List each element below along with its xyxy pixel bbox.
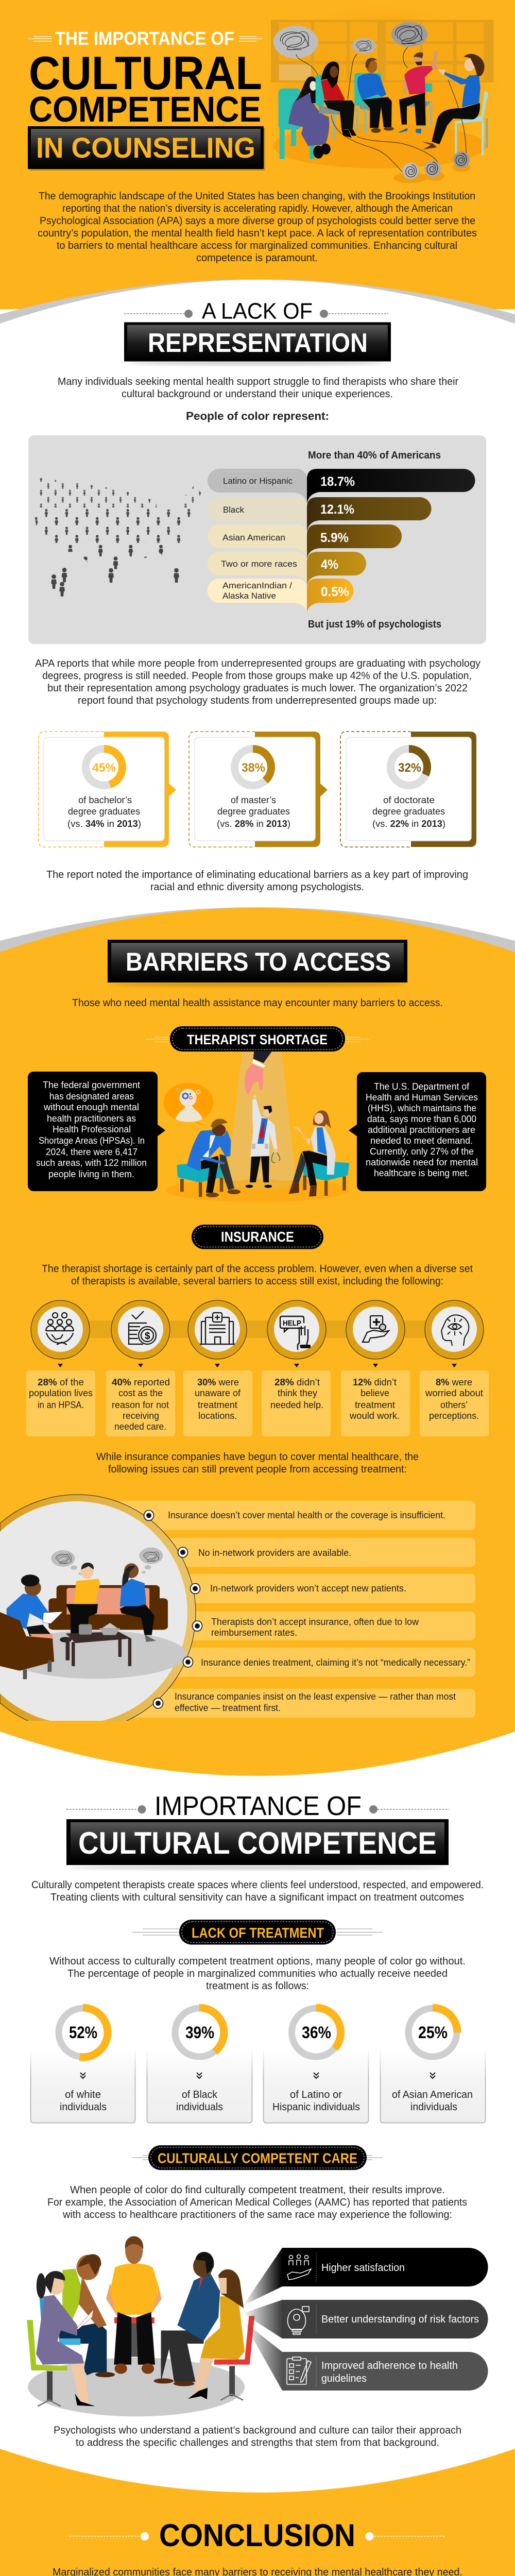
row: Black 12.1% bbox=[208, 497, 432, 531]
stat card: 8% perceptions bbox=[420, 1370, 489, 1436]
stat card: 12% wouldn't work bbox=[341, 1370, 410, 1436]
doctor seated on stool bbox=[289, 1110, 349, 1197]
man in green covering face bbox=[40, 2254, 115, 2377]
text: of doctorate: (vs. 22% in 2013) bbox=[372, 819, 445, 829]
right title rule bbox=[239, 37, 263, 41]
callout: federal government: people living in them. bbox=[48, 1169, 134, 1179]
hand reaching down bbox=[245, 1051, 272, 1096]
donut: 52% bbox=[58, 2008, 108, 2057]
row: two or more races 4% bbox=[208, 552, 366, 585]
callout: federal government: The federal government bbox=[43, 1080, 140, 1090]
donut: 39% bbox=[175, 2008, 224, 2057]
section divider curve: white bbox=[0, 280, 515, 340]
donut: 32%: 32% bbox=[398, 761, 421, 775]
paragraph: APA reports: but their representation among psychology graduates is much lower. The organization’s 2022 bbox=[47, 683, 468, 694]
stat panel: Black individuals 39% bbox=[147, 2008, 252, 2123]
donut: 36%: 36% bbox=[302, 2023, 331, 2042]
stat card: 8% perceptions: others’ bbox=[440, 1400, 468, 1410]
icon: hand with medical cross bbox=[346, 1300, 405, 1359]
donut: 39%: 39% bbox=[185, 2023, 214, 2042]
paragraph: culturally competent therapists: Culturally competent therapists create spaces where clients feel understood, respected, and empowered. bbox=[31, 1879, 484, 1891]
issue row texts: Insurance companies insist on the least expensive — rather than most bbox=[175, 1691, 456, 1702]
stat card: 30% unaware: unaware of bbox=[195, 1388, 241, 1398]
chevron down bbox=[80, 2073, 85, 2078]
donut: 25% bbox=[408, 2008, 457, 2057]
curve: barriers grey edge bbox=[0, 907, 515, 963]
stat panel: white individuals 52%: individuals bbox=[60, 2102, 107, 2113]
woman in yellow on red chair bbox=[188, 2269, 254, 2400]
donut: 45% bbox=[85, 749, 123, 785]
illustration: group of five in discussion bbox=[27, 2236, 254, 2416]
stat card: 28% didn't need help: needed help. bbox=[270, 1400, 323, 1410]
callout: HHS: healthcare is being met. bbox=[374, 1168, 470, 1178]
benefit bar: higher satisfaction bbox=[243, 2248, 488, 2306]
circle ring bbox=[0, 1495, 196, 1732]
text: of master's: degree graduates bbox=[217, 806, 290, 817]
paragraph: therapist shortage problem: of therapists is available, several barriers to access still exist, including the following: bbox=[71, 1276, 443, 1287]
paragraph: insurance companies: While insurance companies have begun to cover mental healthcare, the bbox=[96, 1451, 419, 1463]
stat panel: Asian American 25% bbox=[380, 2008, 485, 2123]
callout: federal government: health practitioners as bbox=[47, 1113, 136, 1124]
thought bubble two bbox=[352, 38, 376, 54]
stat card: 8% perceptions: 8% were bbox=[436, 1377, 472, 1387]
center man bbox=[106, 2236, 162, 2374]
row: American Indian / Alaska Native 0.5% bbox=[207, 579, 353, 612]
title line: the importance of: THE IMPORTANCE OF bbox=[55, 28, 234, 49]
icon: help bbox=[267, 1300, 326, 1359]
intro paragraph: competence is paramount. bbox=[196, 252, 318, 264]
stat panel: Latino or Hispanic 36% bbox=[264, 2008, 369, 2123]
man in yellow bbox=[60, 1563, 100, 1642]
callout: HHS: additional practitioners are bbox=[368, 1125, 475, 1135]
paragraph: when people of color: When people of color do find culturally competent treatment, their results improve. bbox=[70, 2184, 445, 2196]
stat card: 30% unaware: 30% were bbox=[197, 1377, 239, 1387]
row: Latino or Hispanic 18.7% bbox=[208, 469, 475, 503]
couch bbox=[48, 1585, 168, 1630]
pill: culturally competent care bbox=[132, 2145, 383, 2170]
therapist in armchair bbox=[0, 1574, 63, 1679]
stat card: 40% cost bbox=[106, 1370, 175, 1436]
text: of master's: (vs. 28% in 2013) bbox=[217, 819, 290, 829]
label: but just 19% of psychologists: But just 19% of psychologists bbox=[308, 619, 441, 630]
row: Asian American 5.9%: 5.9% bbox=[320, 531, 349, 545]
intro paragraph bbox=[38, 191, 477, 264]
row: American Indian / Alaska Native 0.5%: AmericanIndian / bbox=[222, 581, 292, 590]
paragraph: seeking mental health support: cultural background or understand their unique experiences. bbox=[122, 388, 393, 400]
thought bubble three bbox=[391, 22, 427, 47]
callout: HHS: data, says more than 6,000 bbox=[367, 1114, 476, 1124]
icon: cost coins: $ bbox=[145, 1331, 150, 1342]
stat panel: white individuals 52%: of white bbox=[65, 2089, 101, 2100]
text: of master's: of master’s bbox=[231, 795, 276, 805]
stat card: 28% didn't need help: 28% didn’t bbox=[274, 1377, 320, 1387]
heading: a lack of representation bbox=[124, 299, 391, 365]
illustration: group therapy session bbox=[258, 2, 505, 183]
issue row texts: In-network providers won’t accept new patients. bbox=[210, 1583, 406, 1594]
callout: federal government: without enough mental bbox=[43, 1102, 139, 1112]
stat card: 28% population: in an HPSA. bbox=[38, 1400, 84, 1410]
text: of bachelor's: (vs. 34% in 2013) bbox=[67, 819, 141, 829]
stat card: 12% wouldn't work: treatment bbox=[355, 1400, 395, 1410]
stat card: 28% didn't need help bbox=[262, 1370, 331, 1436]
stat card: 28% didn't need help: think they bbox=[278, 1388, 317, 1398]
paragraph: report noted: The report noted the importance of eliminating educational barriers as a key part of improving bbox=[46, 869, 468, 880]
stat card: 40% cost: reason for not bbox=[112, 1400, 169, 1410]
stat panel: white individuals 52% bbox=[31, 2008, 135, 2123]
man in navy suit bbox=[153, 2252, 220, 2386]
person: man in red t-shirt with raised arm bbox=[398, 50, 437, 133]
row: Black 12.1%: Black bbox=[223, 505, 244, 515]
panel: population comparison bbox=[28, 435, 486, 644]
pill: lack of treatment bbox=[132, 1920, 383, 1944]
paragraph: without access: The percentage of people in marginalized communities who actually receive needed bbox=[67, 1968, 448, 1979]
callout: HHS: needed to meet demand. bbox=[370, 1136, 473, 1146]
background: gold section barriers bbox=[0, 943, 515, 1736]
section divider curve: grey edge bbox=[0, 279, 515, 330]
callout: federal government bbox=[28, 1072, 165, 1191]
stat card: 28% population: 28% of the bbox=[38, 1377, 84, 1387]
row: Black 12.1%: 12.1% bbox=[320, 502, 354, 517]
label: more than 40% of Americans: More than 40% of Americans bbox=[308, 450, 441, 461]
issue row texts bbox=[168, 1510, 470, 1713]
stat panel: Latino or Hispanic 36%: of Latino or bbox=[290, 2089, 342, 2100]
paragraph: without access: treatment is as follows: bbox=[206, 1980, 309, 1992]
row: two or more races 4%: Two or more races bbox=[221, 559, 297, 569]
card: doctorate 32% bbox=[340, 732, 476, 847]
callout: HHS: (HHS), which maintains the bbox=[368, 1103, 476, 1113]
title line: competence: COMPETENCE bbox=[29, 89, 261, 129]
background: gold header bbox=[0, 0, 515, 330]
benefit bar: higher satisfaction: Higher satisfaction bbox=[321, 2262, 405, 2274]
paragraph: psychologists who understand: Psychologists who understand a patient’s background and culture can tailor their approach bbox=[54, 2425, 461, 2436]
row: Asian American 5.9%: Asian American bbox=[222, 533, 285, 543]
callout: HHS: nationwide need for mental bbox=[366, 1157, 478, 1167]
text: of bachelor's bbox=[67, 795, 141, 829]
callout: HHS: Health and Human Services bbox=[366, 1092, 478, 1103]
paragraph: without access: Without access to culturally competent treatment options, many people of color go without. bbox=[49, 1956, 466, 1967]
stat card: 30% unaware bbox=[183, 1370, 252, 1436]
paragraph: culturally competent therapists bbox=[31, 1879, 484, 1903]
stat card: 30% unaware: locations. bbox=[198, 1411, 237, 1421]
text: of doctorate bbox=[372, 795, 445, 829]
callout: HHS: Currently, only 27% of the bbox=[370, 1146, 474, 1157]
paragraph: therapist shortage problem: The therapist shortage is certainly part of the access problem. However, even when a diverse set bbox=[42, 1263, 473, 1275]
stat panel: Black individuals 39%: individuals bbox=[176, 2102, 223, 2113]
text: those who need: Those who need mental health assistance may encounter many barriers to access. bbox=[72, 997, 443, 1009]
title line: cultural: CULTURAL bbox=[29, 47, 262, 99]
intro paragraph: to barriers to mental healthcare access for marginalized communities. Enhancing cultural bbox=[57, 240, 457, 251]
subheading: people of color represent: People of color represent: bbox=[186, 410, 329, 422]
thought bubble one bbox=[273, 26, 318, 58]
thread balls bbox=[393, 151, 471, 183]
woman in blue bbox=[120, 1563, 156, 1642]
donut: 25%: 25% bbox=[418, 2023, 448, 2042]
stat card: 40% cost: 40% reported bbox=[112, 1377, 170, 1387]
stat card: 12% wouldn't work: would work. bbox=[349, 1411, 400, 1421]
title box: in counseling: IN COUNSELING bbox=[36, 131, 255, 164]
paragraph: APA reports bbox=[35, 658, 480, 706]
pointer arrows under icons bbox=[58, 1364, 457, 1367]
map of US made of people bbox=[31, 476, 205, 597]
intro paragraph: Psychological Association (APA) says a more diverse group of psychologists could better serve the bbox=[40, 215, 475, 227]
stat card: 12% wouldn't work: 12% didn’t bbox=[353, 1377, 397, 1387]
pill: therapist shortage: THERAPIST SHORTAGE bbox=[187, 1032, 328, 1047]
illustration: counseling session on couch bbox=[0, 1548, 186, 1679]
thought bubbles bbox=[51, 1548, 163, 1575]
callout: HHS bbox=[349, 1072, 486, 1191]
ring bottom, above gold curve fill bbox=[0, 1700, 158, 1732]
callout: HHS: The U.S. Department of bbox=[374, 1081, 470, 1092]
heading: barriers to access bbox=[108, 940, 407, 986]
donut: 45%: 45% bbox=[92, 761, 116, 775]
pill: insurance: INSURANCE bbox=[221, 1229, 294, 1245]
donut: 52%: 52% bbox=[69, 2023, 97, 2042]
heading: conclusion: CONCLUSION bbox=[159, 2518, 355, 2553]
paragraph: APA reports: degrees, progress is still needed. People from those groups make up 42% of the U.S. population, bbox=[42, 670, 472, 682]
text: of doctorate: of doctorate bbox=[383, 795, 435, 805]
heading: importance of cultural competence: CULTURAL COMPETENCE bbox=[78, 1826, 437, 1860]
issue row texts: effective — treatment first. bbox=[175, 1703, 281, 1713]
stat card: 28% population: population lives bbox=[29, 1388, 93, 1398]
callout: federal government: Shortage Areas (HPSAs). In bbox=[39, 1136, 145, 1146]
paragraph: APA reports: APA reports that while more people from underrepresented groups are graduating with psychology bbox=[35, 658, 480, 669]
stat card: 28% population bbox=[26, 1370, 95, 1436]
chevron down bbox=[314, 2073, 319, 2078]
heading: importance of cultural competence bbox=[66, 1791, 449, 1869]
text: of doctorate: degree graduates bbox=[372, 806, 445, 817]
callout: federal government: 2024, there were 6,417 bbox=[46, 1147, 138, 1157]
stressed man on stool bbox=[177, 1119, 241, 1197]
row: American Indian / Alaska Native 0.5%: Alaska Native bbox=[222, 591, 276, 601]
white section importance background bbox=[0, 1732, 515, 2473]
issue row texts: Therapists don’t accept insurance, often due to low bbox=[211, 1617, 419, 1627]
icon: help: HELP bbox=[283, 1319, 301, 1328]
brain thought bubble bbox=[164, 1083, 213, 1125]
person: woman in red top bbox=[316, 62, 356, 140]
stat card: 40% cost: receiving bbox=[123, 1411, 159, 1421]
text: of bachelor's: degree graduates bbox=[68, 806, 140, 817]
issue row texts: Insurance denies treatment, claiming it’s not “medically necessary.” bbox=[201, 1657, 470, 1668]
intro paragraph: The demographic landscape of the United States has been changing, with the Brookings Institution bbox=[39, 191, 475, 202]
paragraph: report noted: racial and ethnic diversity among psychologists. bbox=[150, 882, 364, 893]
paragraph: psychologists who understand: to address the specific challenges and strengths that stem from that background. bbox=[76, 2437, 439, 2448]
heading: barriers to access: BARRIERS TO ACCESS bbox=[126, 947, 391, 976]
heading: conclusion bbox=[70, 2518, 445, 2553]
paragraph: insurance companies bbox=[96, 1451, 419, 1475]
background: white section one bbox=[0, 309, 515, 927]
heading: a lack of representation: REPRESENTATION bbox=[148, 328, 368, 358]
donut: 36% bbox=[291, 2008, 341, 2057]
person: woman in hijab on chair bbox=[279, 76, 331, 159]
paragraph: psychologists who understand bbox=[54, 2425, 461, 2448]
stat panel: Black individuals 39%: of Black bbox=[182, 2089, 218, 2100]
paragraph: seeking mental health support: Many individuals seeking mental health support struggle to find therapists who share their bbox=[58, 376, 458, 387]
callout: federal government: Health Professional bbox=[53, 1124, 131, 1134]
row: Latino or Hispanic 18.7%: 18.7% bbox=[320, 474, 355, 489]
issue row texts: No in-network providers are available. bbox=[198, 1548, 351, 1558]
band behind icons bbox=[60, 1320, 454, 1338]
paragraph: therapist shortage problem bbox=[42, 1263, 473, 1287]
benefit bar: risk factors: Better understanding of risk factors bbox=[321, 2314, 479, 2325]
intro paragraph: country’s population, the mental health field hasn’t kept pace. A lack of representation contributes bbox=[38, 228, 477, 239]
paragraph: seeking mental health support bbox=[58, 376, 458, 400]
callout: federal government: such areas, with 122 million bbox=[36, 1158, 147, 1168]
curve: barriers gold top bbox=[0, 908, 515, 969]
paragraph: without access bbox=[49, 1956, 466, 1992]
row: two or more races 4%: 4% bbox=[321, 557, 338, 572]
stat panel: Latino or Hispanic 36%: Hispanic individuals bbox=[272, 2102, 360, 2113]
stat panel: Asian American 25%: of Asian American bbox=[392, 2089, 473, 2100]
woman with notepad on green chair bbox=[27, 2271, 95, 2406]
chevron down bbox=[197, 2073, 202, 2078]
paragraph: culturally competent therapists: Treating clients with cultural sensitivity can have a significant impact on treatment outcomes bbox=[50, 1892, 464, 1903]
pill: culturally competent care: CULTURALLY COMPETENT CARE bbox=[158, 2150, 357, 2166]
paragraph: when people of color bbox=[47, 2184, 467, 2221]
heading: importance of cultural competence: IMPORTANCE OF bbox=[154, 1791, 362, 1821]
stat panel: Asian American 25%: individuals bbox=[410, 2102, 457, 2113]
paragraph: when people of color: with access to healthcare practitioners of the same race may experience the following: bbox=[62, 2209, 452, 2221]
paragraph: APA reports: report found that psychology students from underrepresented groups made up: bbox=[78, 695, 437, 706]
stat card: 8% perceptions: perceptions. bbox=[429, 1411, 479, 1421]
row: American Indian / Alaska Native 0.5%: 0.5% bbox=[321, 585, 349, 599]
circle interior bbox=[0, 1501, 187, 1724]
stat card: 40% cost: needed care. bbox=[114, 1421, 166, 1432]
benefit bar: risk factors bbox=[243, 2300, 488, 2338]
issue row texts: Insurance doesn’t cover mental health or the coverage is insufficient. bbox=[168, 1510, 445, 1520]
pill: therapist shortage bbox=[145, 1026, 370, 1052]
paragraph: when people of color: For example, the Association of American Medical Colleges (AAMC) has reported that patients bbox=[47, 2197, 467, 2208]
heading: a lack of representation: A LACK OF bbox=[202, 299, 313, 324]
doctor reaching up bbox=[246, 1095, 280, 1188]
benefit bar: adherence: Improved adherence to health bbox=[321, 2360, 458, 2371]
insurance issue rows bbox=[118, 1501, 475, 1718]
coffee table bbox=[66, 1623, 131, 1666]
chevron down bbox=[430, 2073, 435, 2078]
paragraph: report noted bbox=[46, 869, 468, 893]
row: Asian American 5.9% bbox=[208, 524, 402, 558]
text: of bachelor's: of bachelor’s bbox=[78, 795, 132, 805]
donut: 38% bbox=[235, 749, 271, 785]
person: man in blue sweater bbox=[354, 58, 394, 133]
left title rule bbox=[28, 37, 52, 41]
benefit bar: adherence bbox=[243, 2321, 488, 2391]
icon: cost coins bbox=[111, 1300, 170, 1359]
card: bachelor's 45% bbox=[39, 732, 176, 847]
donut: 38%: 38% bbox=[242, 761, 265, 775]
issue row bullets bbox=[144, 1511, 202, 1708]
tangled thought wires bbox=[296, 47, 466, 178]
stat card: 40% cost: cost as the bbox=[118, 1388, 163, 1398]
stat card: 12% wouldn't work: believe bbox=[360, 1388, 389, 1398]
illustration: therapist shortage spotlight bbox=[164, 1051, 349, 1202]
stat card: 8% perceptions: worried about bbox=[425, 1388, 483, 1398]
pill: insurance bbox=[192, 1225, 323, 1249]
icon: mind and eye bbox=[425, 1300, 484, 1359]
benefit bar: adherence: guidelines bbox=[321, 2373, 367, 2384]
intro paragraph: reporting that the nation’s diversity is accelerating rapidly. However, although the American bbox=[62, 203, 453, 214]
callout: federal government: has designated areas bbox=[49, 1091, 134, 1101]
card: master's 38% bbox=[189, 732, 328, 847]
paragraph: insurance companies: following issues can still prevent people from accessing treatment: bbox=[108, 1464, 407, 1475]
title block bbox=[28, 28, 265, 171]
pill: lack of treatment: LACK OF TREATMENT bbox=[192, 1925, 324, 1941]
issue row texts: reimbursement rates. bbox=[211, 1628, 297, 1638]
text: of master's bbox=[217, 795, 290, 829]
stat card: 30% unaware: treatment bbox=[198, 1400, 237, 1410]
row: Latino or Hispanic 18.7%: Latino or Hispanic bbox=[223, 476, 293, 486]
gold curve bottom of barriers section bbox=[0, 1721, 515, 1776]
icon: hospital bbox=[188, 1300, 247, 1359]
donut: 32% bbox=[390, 749, 427, 785]
icon: people and globe bbox=[31, 1300, 90, 1359]
person: therapist in blue jacket bbox=[422, 54, 488, 156]
background: gold conclusion with curved white edge bbox=[0, 2449, 515, 2576]
